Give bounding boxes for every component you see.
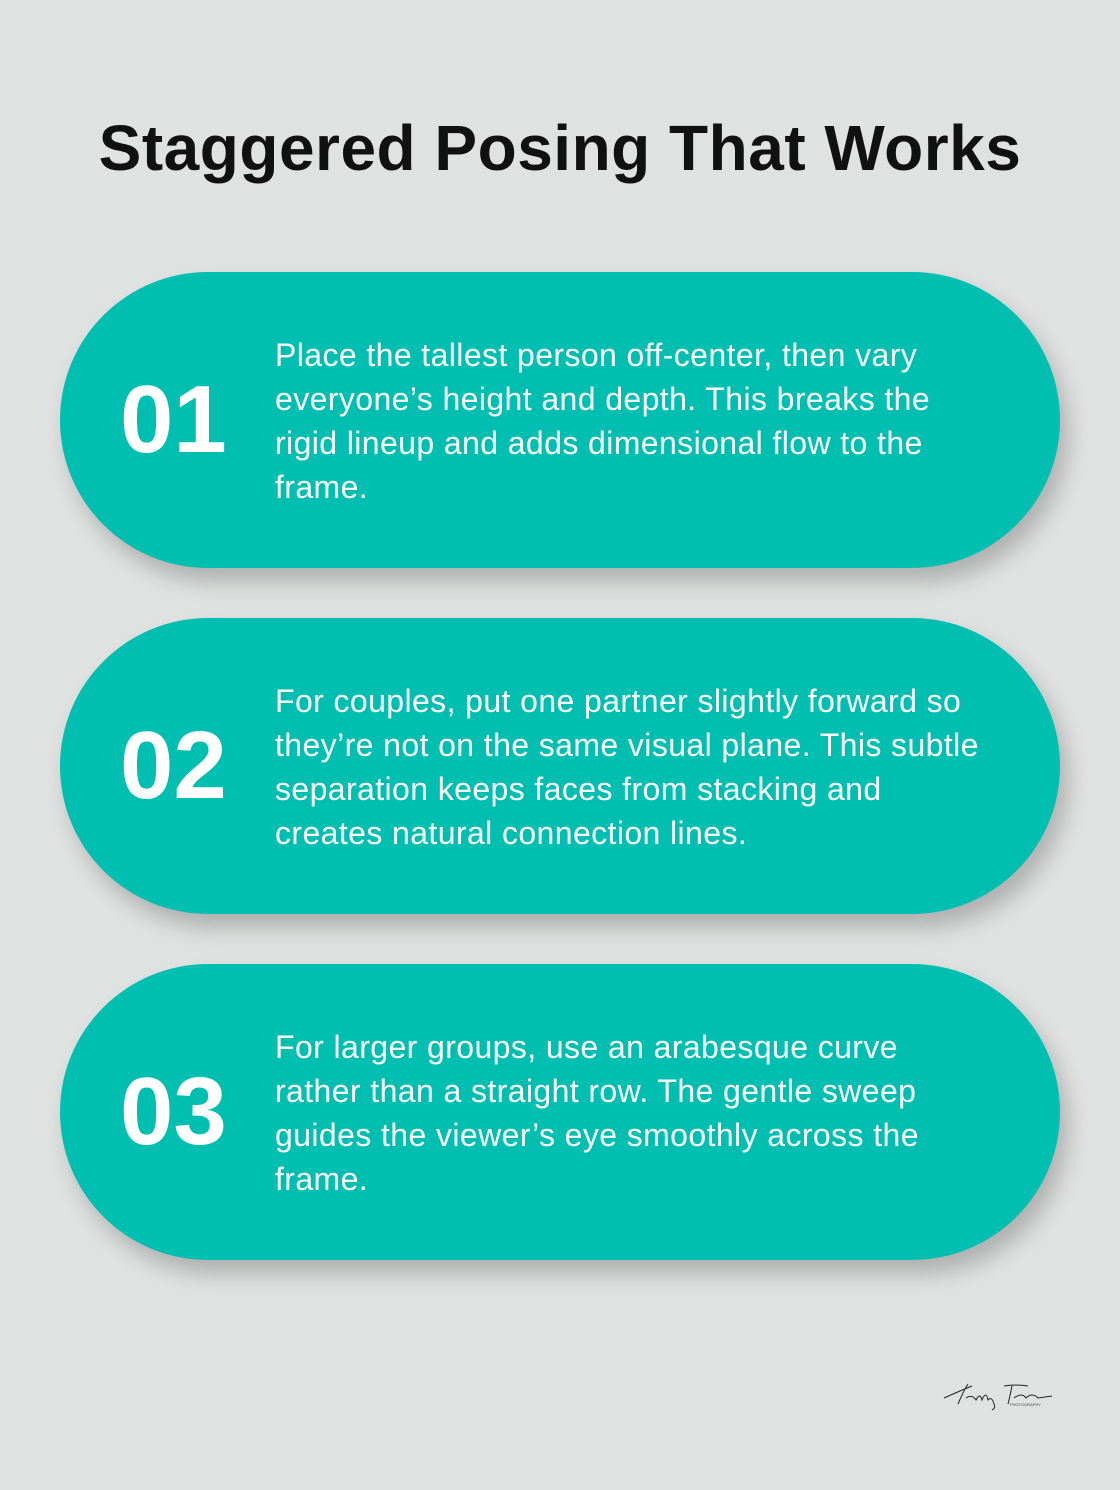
number 01: 01 (120, 366, 227, 473)
title: Staggered Posing That Works (99, 112, 1021, 184)
text 02: they’re not on the same visual plane. This subtle (275, 727, 979, 763)
panel: step 03 (60, 964, 1060, 1260)
text 03: For larger groups, use an arabesque curve (275, 1029, 898, 1065)
text 02: creates natural connection lines. (275, 815, 747, 851)
number 03: 03 (120, 1058, 227, 1165)
text 02: separation keeps faces from stacking and (275, 771, 882, 807)
text 03: frame. (275, 1161, 368, 1197)
logo signature: PHOTOGRAPHY (1010, 1402, 1041, 1407)
text 01: everyone’s height and depth. This breaks the (275, 381, 930, 417)
logo signature (944, 1384, 1052, 1410)
panel: step 01 (60, 272, 1060, 568)
text 03: guides the viewer’s eye smoothly across the (275, 1117, 919, 1153)
text 02: For couples, put one partner slightly forward so (275, 683, 961, 719)
text 01: Place the tallest person off-center, then vary (275, 337, 917, 373)
panel: step 02 (60, 618, 1060, 914)
text 03: rather than a straight row. The gentle sweep (275, 1073, 916, 1109)
text 02 (275, 683, 979, 851)
text 03 (275, 1029, 919, 1197)
text 01: rigid lineup and adds dimensional flow to the (275, 425, 923, 461)
text 01: frame. (275, 469, 368, 505)
number 02: 02 (120, 712, 227, 819)
text 01 (275, 337, 930, 505)
